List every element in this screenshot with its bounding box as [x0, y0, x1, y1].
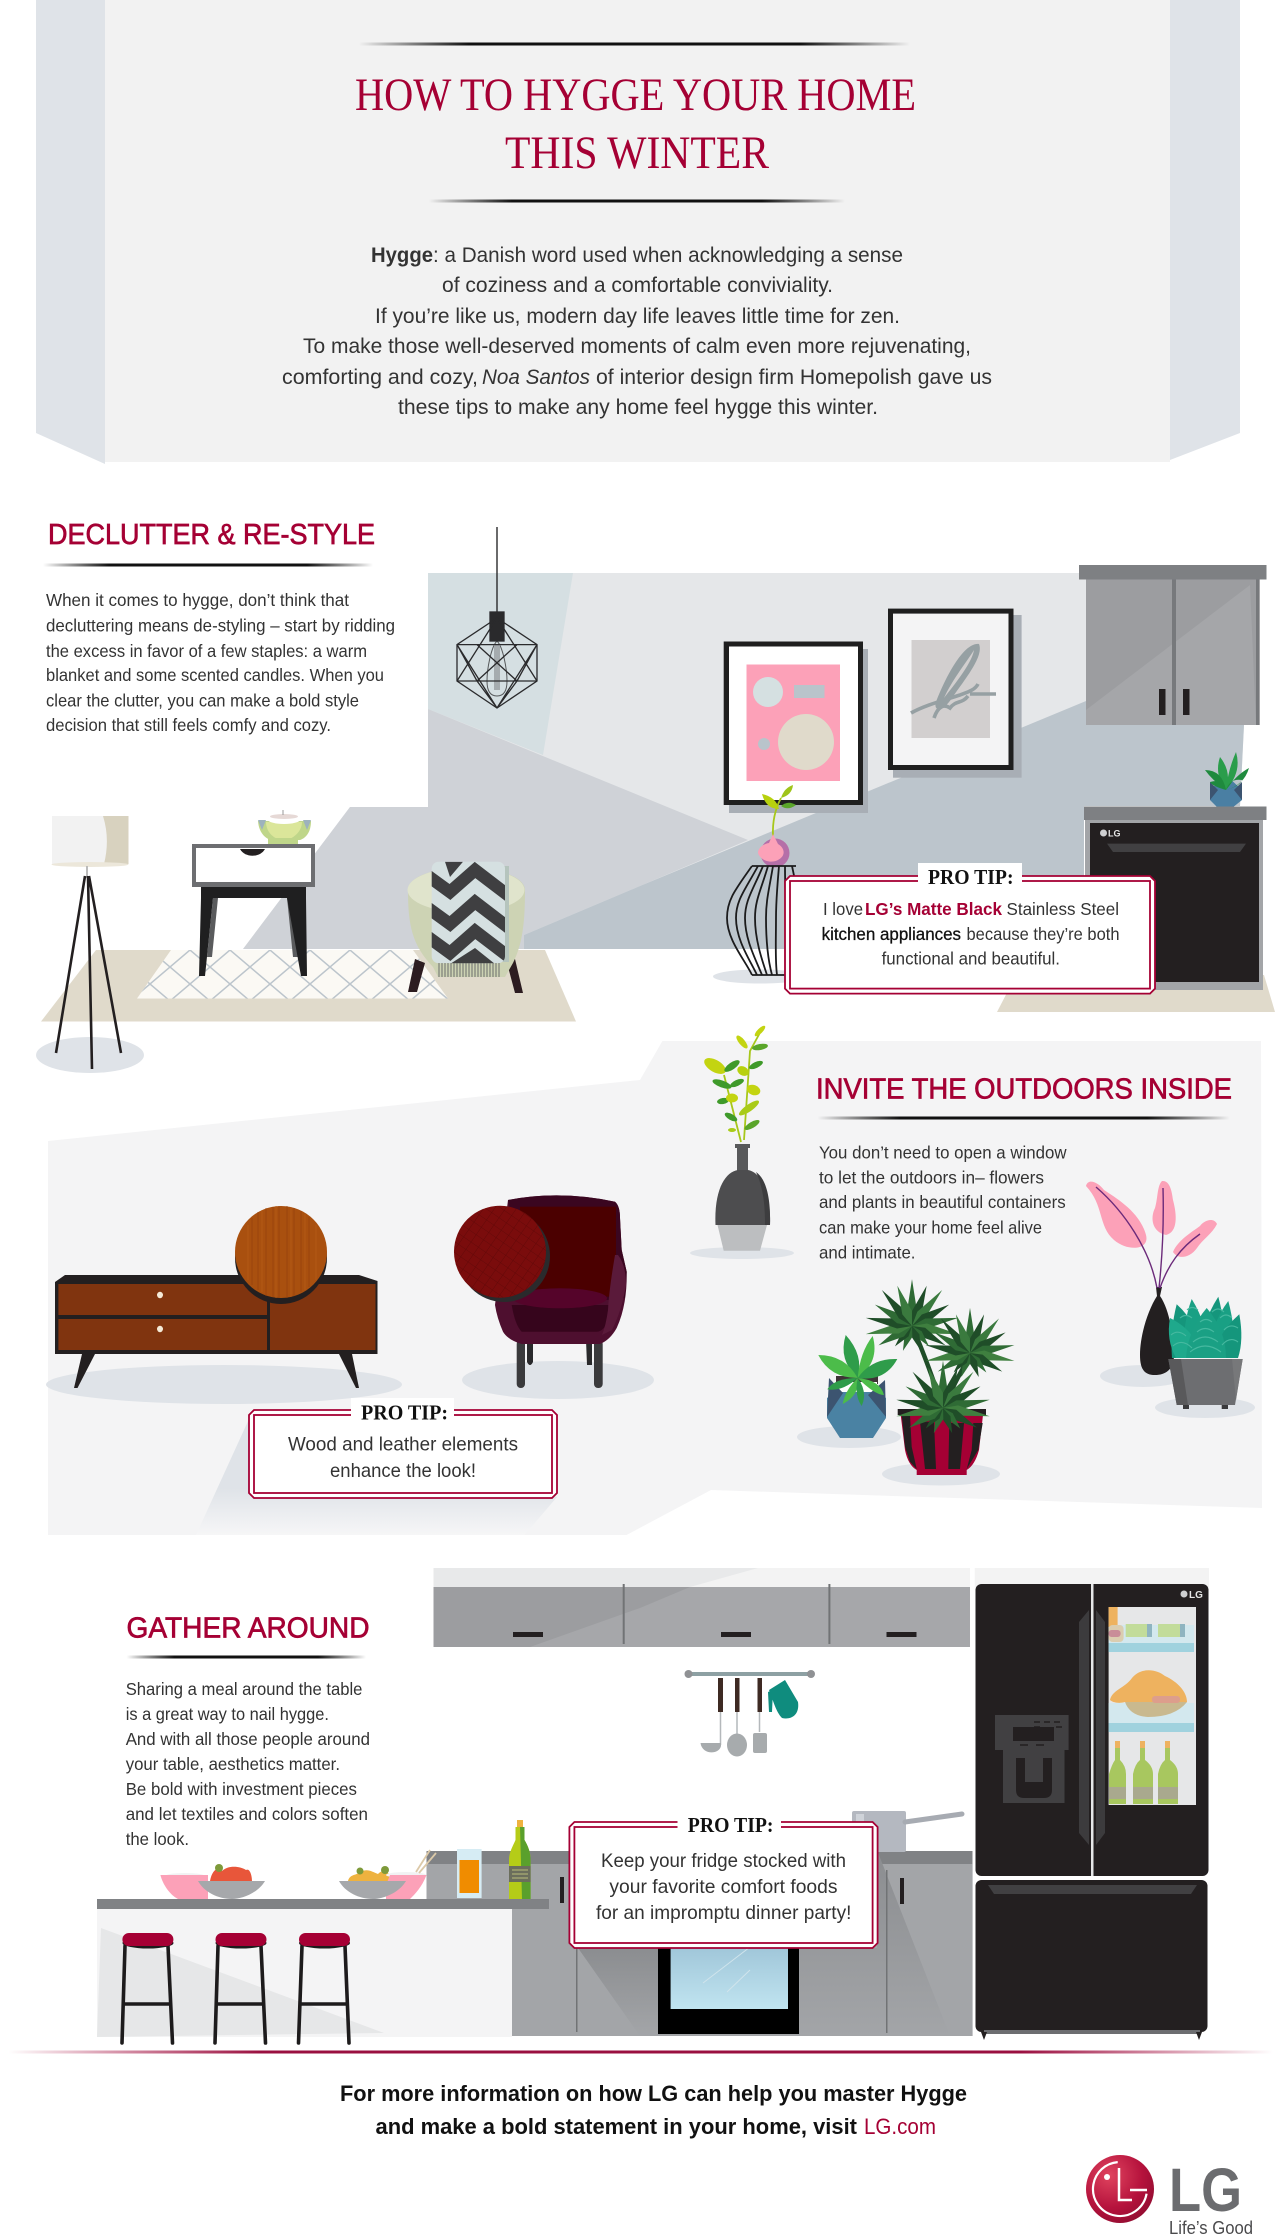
icon: bowls — [160, 1850, 436, 1899]
icon: pink leaf plant — [1086, 1181, 1217, 1387]
callout: pro tip 1: Stainless Steel — [1006, 899, 1119, 919]
intro text: : a Danish word used when acknowledging a sense — [433, 244, 903, 267]
body text: and let textiles and colors soften — [126, 1804, 368, 1824]
icon: leafy plant in vase — [690, 1024, 794, 1259]
body text — [46, 590, 395, 735]
body text: can make your home feel alive — [819, 1218, 1042, 1238]
intro text: Noa Santos — [482, 366, 590, 389]
icon: lower cabinets and stove — [426, 1811, 973, 2036]
callout: pro tip 2: enhance the look! — [330, 1460, 476, 1482]
body text: to let the outdoors in– flowers — [819, 1168, 1044, 1188]
body text: blanket and some scented candles. When you — [46, 665, 384, 685]
callout: pro tip 1: kitchen appliances — [822, 924, 961, 944]
body text: decision that still feels comfy and cozy. — [46, 715, 331, 735]
icon: wood swatch — [235, 1206, 327, 1304]
body text: your table, aesthetics matter. — [126, 1754, 340, 1774]
body text: and intimate. — [819, 1243, 916, 1263]
intro text: of interior design firm Homepolish gave us — [596, 366, 992, 389]
title — [355, 69, 916, 179]
intro text — [282, 244, 992, 419]
callout: pro tip 2: PRO TIP: — [361, 1400, 448, 1424]
intro text: If you’re like us, modern day life leaves little time for zen. — [375, 305, 900, 328]
heading: GATHER AROUND — [126, 1613, 370, 1645]
wall — [243, 573, 1244, 949]
panel: invite the outdoors inside — [46, 1024, 1262, 1535]
call to action: LG.com — [864, 2114, 936, 2139]
panel: header — [36, 0, 1240, 464]
icon: stool with chevron blanket — [408, 862, 525, 993]
icon: palm in red pot — [865, 1279, 1015, 1486]
icon: upper kitchen cabinets — [434, 1568, 970, 1647]
body text: And with all those people around — [126, 1729, 370, 1749]
body text: clear the clutter, you can make a bold style — [46, 690, 359, 710]
icon: dishwasher with counter — [1084, 806, 1266, 990]
callout: pro tip 3: Keep your fridge stocked with — [601, 1850, 846, 1872]
icon: wine bottle — [509, 1820, 531, 1899]
heading: DECLUTTER & RE-STYLE — [48, 519, 375, 551]
body text: and plants in beautiful containers — [819, 1192, 1066, 1212]
icon: bar counter — [97, 1899, 549, 2037]
icon: sideboard — [46, 1275, 402, 1404]
intro text: these tips to make any home feel hygge this winter. — [398, 396, 878, 419]
icon: dishwasher with counter: LG — [1108, 828, 1120, 838]
intro text: Hygge — [371, 244, 433, 267]
icon: fridge: LG — [1189, 1590, 1203, 1601]
floor rug beige — [41, 950, 576, 1022]
callout: pro tip 2: Wood and leather elements — [288, 1434, 518, 1456]
icon: pendant lamp — [457, 527, 537, 708]
body text: the excess in favor of a few staples: a warm — [46, 641, 367, 661]
body text: the look. — [126, 1829, 189, 1849]
intro text: To make those well-deserved moments of calm even more rejuvenating, — [303, 335, 971, 358]
panel: footer — [8, 2050, 1273, 2236]
body text — [126, 1679, 370, 1849]
icon: floor lamp — [36, 816, 144, 1073]
icon: pot — [852, 1811, 962, 1852]
title: THIS WINTER — [505, 127, 770, 179]
icon: blue pot plant — [797, 1335, 901, 1448]
icon: nightstand with candle — [192, 810, 315, 976]
icon: framed pink art — [724, 642, 868, 813]
call to action: For more information on how LG can help you master Hygge — [340, 2081, 967, 2106]
body text: You don’t need to open a window — [819, 1142, 1067, 1162]
callout: pro tip 1: because they’re both — [966, 924, 1120, 944]
icon: water dispenser — [995, 1715, 1069, 1803]
callout: pro tip 1: functional and beautiful. — [882, 948, 1060, 968]
body text: decluttering means de-styling – start by ridding — [46, 616, 395, 636]
body text: Sharing a meal around the table — [126, 1679, 362, 1699]
icon: juice glass — [457, 1849, 482, 1898]
LG logo: LG — [1169, 2156, 1242, 2224]
heading: INVITE THE OUTDOORS INSIDE — [816, 1074, 1232, 1106]
title: HOW TO HYGGE YOUR HOME — [355, 69, 916, 121]
intro text: comforting and cozy, — [282, 366, 478, 389]
callout: pro tip 2 — [249, 1398, 557, 1498]
panel: gather around — [97, 1568, 1209, 2043]
callout: pro tip 1: PRO TIP: — [928, 865, 1014, 889]
callout: pro tip 3: PRO TIP: — [688, 1813, 774, 1837]
callout: pro tip 1: I love — [823, 899, 863, 919]
callout: pro tip 3 — [569, 1812, 878, 1948]
body text: is a great way to nail hygge. — [126, 1704, 329, 1724]
call to action — [340, 2081, 967, 2139]
body text: When it comes to hygge, don’t think that — [46, 590, 349, 610]
callout: pro tip 3: for an impromptu dinner party! — [596, 1902, 851, 1924]
LG logo — [1086, 2155, 1253, 2236]
icon: framed sketch art — [888, 609, 1022, 778]
icon: striped vase with sprout — [713, 785, 807, 984]
intro text: of coziness and a comfortable conviviality. — [442, 274, 833, 297]
patterned rug — [137, 950, 448, 998]
callout: pro tip 1: LG’s Matte Black — [865, 899, 1002, 919]
icon: armchair — [454, 1195, 654, 1399]
callout: pro tip 3: your favorite comfort foods — [609, 1876, 838, 1898]
icon: upper cabinet — [1079, 565, 1266, 725]
fridge window — [1109, 1607, 1196, 1805]
call to action: and make a bold statement in your home, visit — [376, 2114, 858, 2139]
body text: Be bold with investment pieces — [126, 1779, 357, 1799]
icon: succulent in grey pot — [1155, 1297, 1255, 1418]
callout: pro tip 1 — [785, 863, 1155, 994]
icon: small plant on counter — [1205, 752, 1249, 808]
icon: bar stools — [122, 1933, 350, 2043]
body text — [819, 1142, 1067, 1263]
panel: declutter and re-style — [36, 519, 1275, 1073]
icon: utensil rail — [684, 1670, 815, 1756]
icon: fridge — [975, 1568, 1209, 2040]
